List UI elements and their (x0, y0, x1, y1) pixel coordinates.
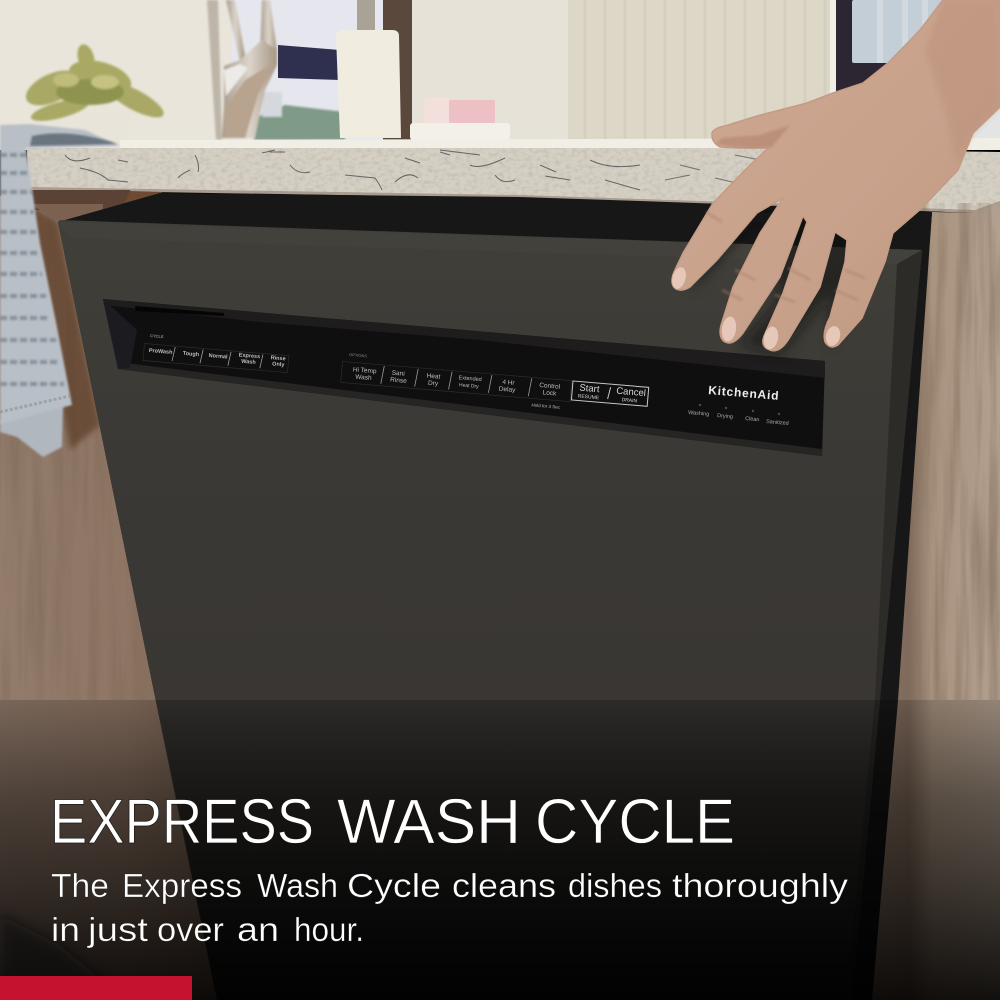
forearm shading (925, 0, 1000, 165)
title: WASH (337, 787, 521, 857)
door side bevel (846, 250, 922, 1000)
option buttons: OPTIONS (349, 352, 368, 359)
dark gap around door (58, 193, 975, 1000)
towel lower fold (0, 405, 63, 457)
plant pot (74, 112, 130, 142)
option buttons: Lock (542, 389, 557, 398)
cycle buttons: CYCLE (150, 333, 164, 339)
option buttons: Sani (391, 370, 405, 378)
option buttons: Heat Dry (459, 382, 479, 390)
option buttons: Hi Temp (353, 366, 377, 375)
option buttons (340, 352, 573, 411)
cycle buttons: Rinse (270, 355, 286, 362)
cycle buttons: Express (239, 353, 260, 360)
option buttons: Heat (426, 373, 441, 381)
soap dish and soap (410, 97, 510, 140)
option buttons: Hold for 3 Sec (531, 402, 561, 410)
description text: cleans (452, 868, 556, 905)
start and cancel buttons: RESUME (577, 393, 600, 401)
description text: Wash (257, 868, 338, 905)
faucet (207, 0, 277, 140)
finger creases (706, 212, 865, 302)
door front (58, 220, 922, 1000)
KitchenAid logo: KitchenAid (708, 383, 780, 403)
status indicators: Clean (745, 416, 760, 423)
title (50, 787, 735, 857)
start and cancel buttons: Start (579, 383, 600, 395)
towel stripes (0, 155, 70, 412)
towel main drape (0, 124, 120, 424)
red accent bar (0, 976, 192, 1000)
option buttons: Rinse (390, 377, 407, 385)
description text: hour. (294, 912, 364, 949)
thumb shading (716, 125, 790, 148)
description text: Express (122, 868, 242, 905)
description text: over (157, 912, 224, 949)
window frame (383, 0, 412, 140)
status indicators (688, 404, 789, 427)
panel recess (103, 299, 825, 456)
cycle buttons: Only (272, 361, 286, 368)
plant (21, 42, 168, 125)
dishwasher door (58, 220, 922, 1000)
finger nails (670, 266, 842, 351)
door lower shading (157, 700, 898, 1000)
option buttons: Wash (355, 374, 372, 382)
option buttons: 4 Hr (502, 379, 516, 387)
right wood cabinet (870, 203, 1000, 1000)
title: EXPRESS (50, 787, 314, 857)
title: CYCLE (535, 787, 735, 857)
far window with dark frame (830, 0, 1000, 148)
status indicators: Sanitized (766, 419, 789, 427)
option buttons: Extended (458, 375, 482, 383)
hand and arm shape (672, 0, 1000, 351)
option buttons: Dry (428, 380, 439, 388)
window view (232, 0, 384, 140)
cycle buttons (143, 333, 290, 373)
cycle buttons: Normal (208, 353, 228, 361)
description text: just (87, 912, 149, 949)
start and cancel buttons: Cancel (616, 386, 646, 399)
option buttons: Delay (498, 386, 516, 394)
cycle buttons: Wash (241, 359, 257, 366)
start and cancel buttons (571, 381, 649, 406)
countertop (27, 138, 1000, 212)
status indicators: Drying (717, 413, 733, 420)
description text: Cycle (347, 868, 441, 905)
description text (51, 868, 848, 949)
description text: an (237, 912, 279, 949)
door top bevel (58, 222, 922, 264)
bottom dark gradient overlay (0, 700, 1000, 1000)
cycle buttons: Tough (182, 351, 200, 358)
description text: in (51, 912, 80, 949)
finger shadows on door (690, 210, 880, 355)
towel (0, 124, 120, 457)
wall (0, 0, 1000, 150)
ribbed wall panel (568, 0, 834, 142)
cycle buttons: ProWash (149, 348, 173, 356)
status indicators: Washing (688, 410, 709, 418)
description text: thoroughly (672, 868, 848, 905)
towel top fold (30, 133, 118, 146)
left wood cabinet (0, 190, 225, 1000)
option buttons: Control (539, 382, 561, 391)
start and cancel buttons: DRAIN (621, 397, 638, 404)
description text: dishes (568, 868, 662, 905)
description text: The (51, 868, 109, 905)
hand (670, 0, 1000, 355)
soap dispenser (336, 0, 401, 138)
control panel (103, 299, 825, 456)
dark corner shadow (0, 915, 125, 1000)
